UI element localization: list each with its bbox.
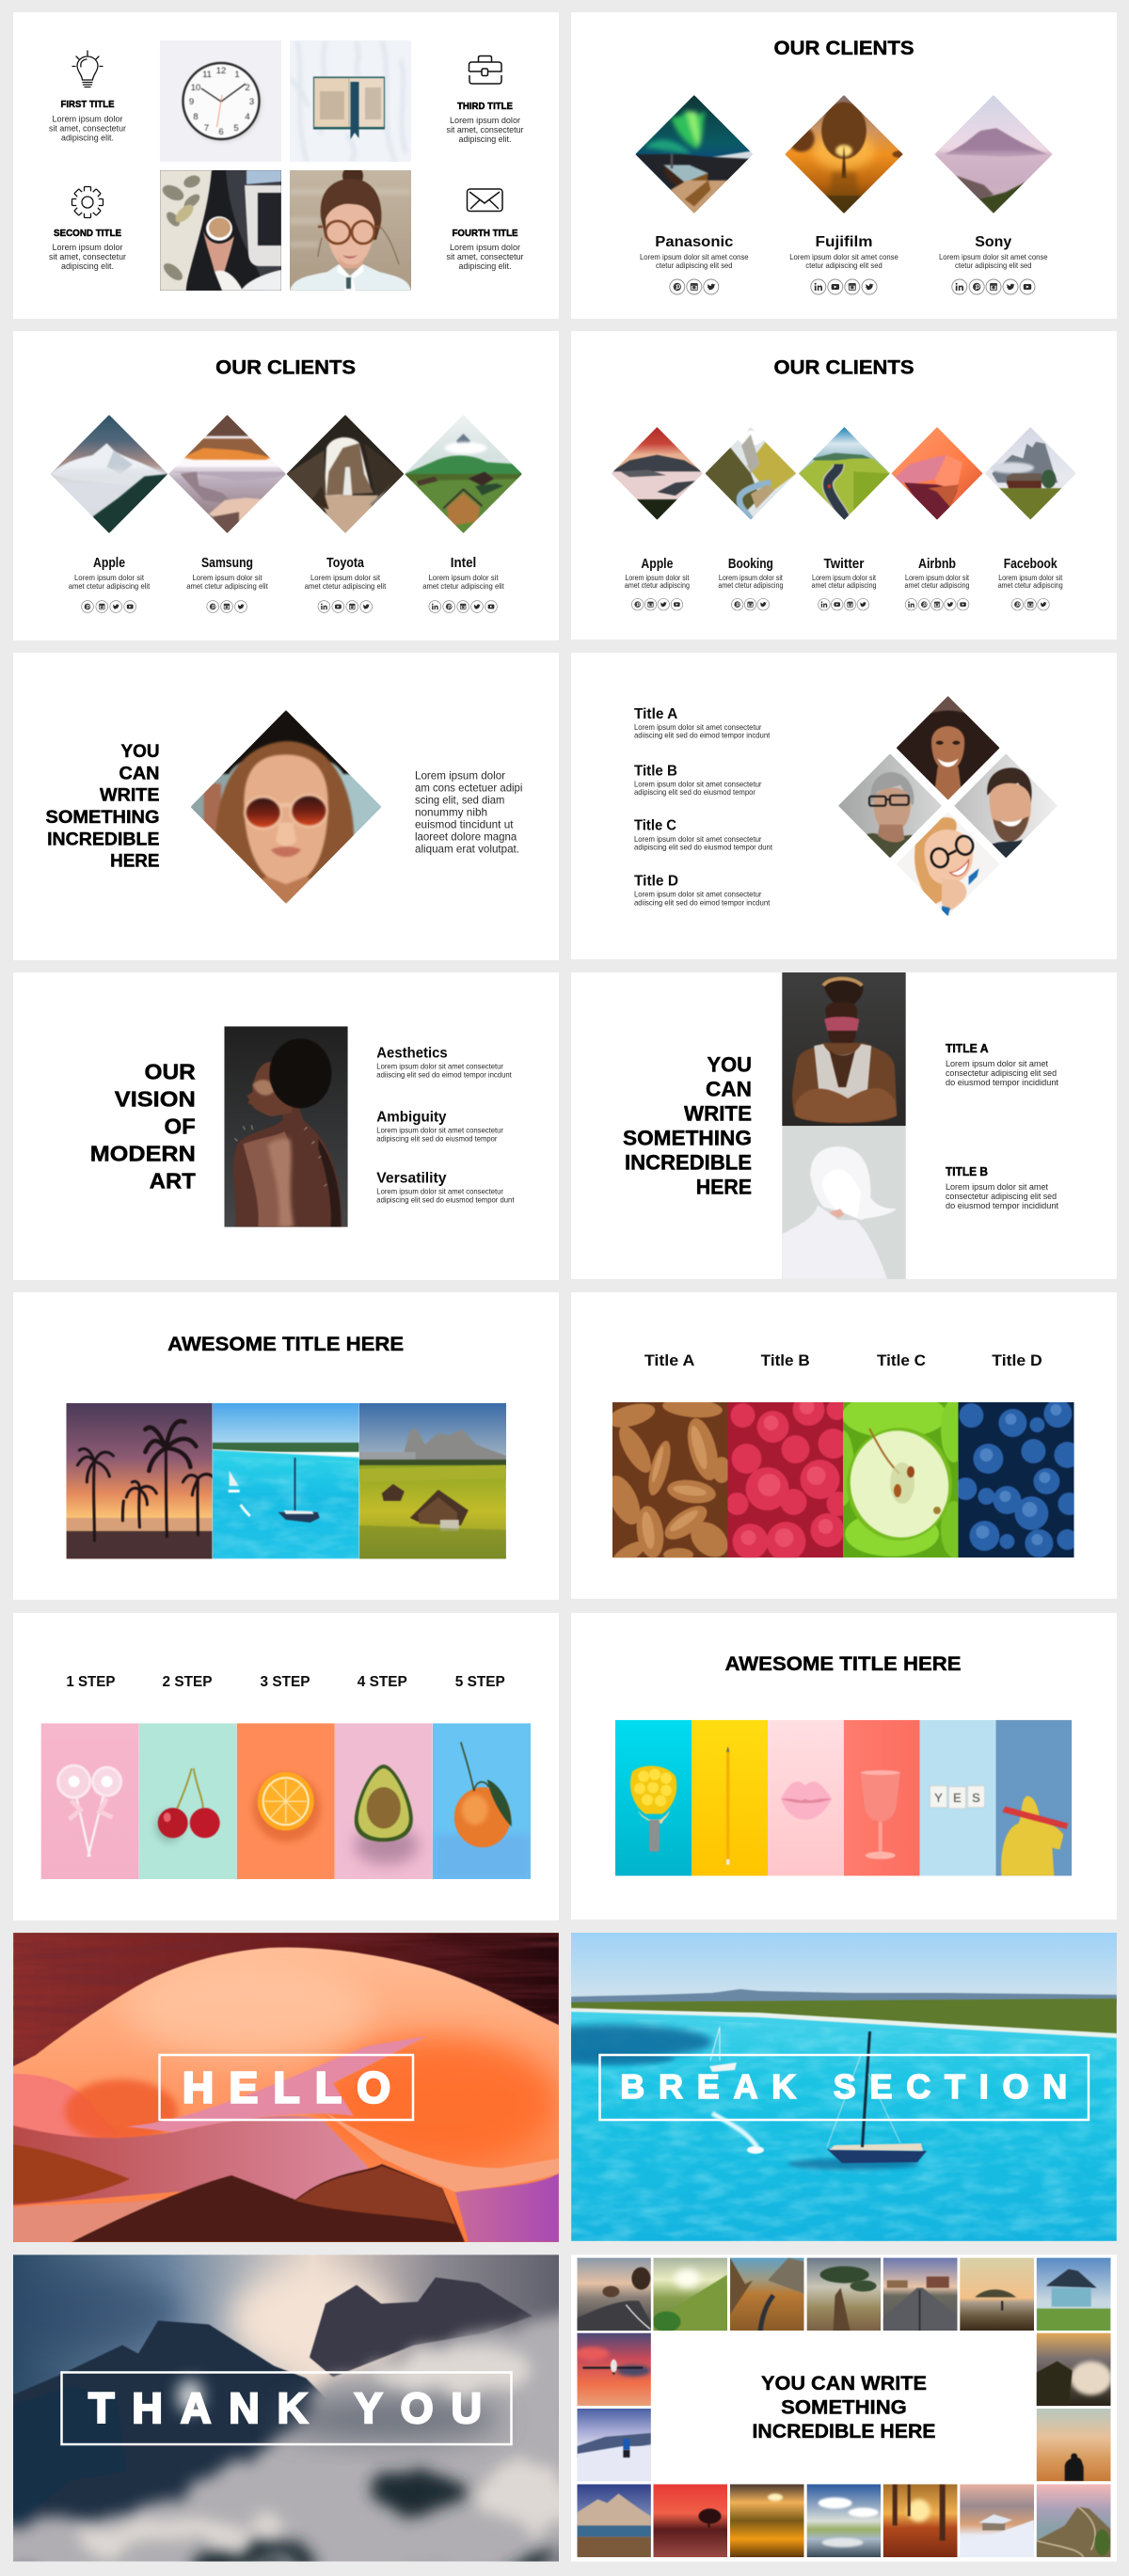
heading: our vision of modern art: VISION — [115, 1087, 196, 1112]
text: second title body: sit amet, consectetur — [49, 252, 126, 261]
panel: four fruit strips — [571, 1292, 1117, 1599]
text: first title body: sit amet, consectetur — [49, 124, 126, 134]
client: fujifilm: Fujifilm — [815, 234, 873, 250]
icon: light bulb — [72, 51, 103, 87]
panel: photo mosaic frame — [571, 2255, 1117, 2562]
photo: straight asphalt road — [883, 2257, 958, 2331]
photo: wall clock: 2 — [245, 83, 250, 93]
client: fujifilm — [789, 234, 898, 270]
item: title b: do eiusmod tempor incididunt — [946, 1201, 1058, 1210]
list item: title b: adipiscing elit sed do eiusmod tempor — [634, 787, 755, 797]
heading: third title: THIRD TITLE — [457, 102, 513, 112]
diamond photo: winding road — [799, 427, 890, 520]
client: intel: amet ctetur adipiscing elit — [422, 581, 504, 591]
photo: autumn valley road — [730, 2257, 803, 2331]
list item: title a: adiiscing elit sed do eimod tempor incdunt — [634, 731, 771, 740]
heading: you can write something incredible here: WRITE — [684, 1101, 752, 1125]
diamond photo: hut and dolomites — [985, 427, 1076, 519]
client: sony: Sony — [975, 234, 1011, 250]
list item: title b: Title B — [634, 763, 677, 779]
photo: turquoise sea and sailboat — [213, 1403, 359, 1559]
client: airbnb: amet ctetur adipiscing — [905, 581, 969, 590]
client: sony: ctetur adipiscing elit sed — [955, 261, 1032, 270]
statement: you can write something incredible here — [753, 2373, 935, 2442]
text: first title body: Lorem ipsum dolor — [53, 114, 123, 123]
item: title b — [946, 1165, 1058, 1210]
panel: thank you mountains — [0, 2255, 578, 2575]
labels: title a to d: Title C — [877, 1351, 926, 1369]
heading: our vision of modern art: MODERN — [90, 1142, 196, 1166]
text: body paragraph: Lorem ipsum dolor — [415, 769, 505, 782]
item: title a: Lorem ipsum dolor sit amet — [946, 1059, 1048, 1068]
text: second title body — [49, 243, 126, 271]
photo: lollipops on pink — [41, 1723, 139, 1879]
client: booking: Lorem ipsum dolor sit — [719, 574, 784, 582]
heading: you can write something incredible here: YOU — [708, 1052, 752, 1076]
client: facebook: amet ctetur adipiscing — [998, 581, 1063, 590]
photo: airplane in red clouds — [577, 2332, 651, 2406]
panel: statement with two photos — [571, 972, 1117, 1279]
client: panasonic — [640, 234, 749, 270]
icons: panasonic social — [670, 279, 719, 294]
title box: break section: BREAK SECTION — [620, 2067, 1067, 2106]
client: toyota: Toyota — [326, 555, 365, 571]
client: facebook: Lorem ipsum dolor sit — [998, 574, 1063, 582]
list item: title b — [634, 763, 762, 797]
heading: awesome title here: AWESOME TITLE HERE — [167, 1334, 404, 1355]
item: title b: consectetur adipiscing elit sed — [946, 1192, 1057, 1201]
heading: our vision of modern art — [90, 1060, 196, 1193]
diamond photo: green huts — [405, 416, 522, 533]
client: toyota — [305, 555, 387, 591]
item: ambiguity: Ambiguity — [376, 1109, 447, 1125]
icons: fujifilm social — [811, 279, 877, 294]
text: body paragraph: am cons ectetuer adipi — [415, 782, 522, 794]
heading: our clients: OUR CLIENTS — [215, 357, 356, 379]
list item: title a: Title A — [634, 706, 677, 722]
client: apple — [69, 555, 151, 591]
diamond photo: river valley — [706, 427, 796, 519]
photo: avocado — [335, 1723, 433, 1879]
text: second title body: Lorem ipsum dolor — [53, 243, 123, 252]
client: airbnb: Airbnb — [918, 556, 956, 572]
client: facebook: Facebook — [1004, 556, 1057, 572]
text: fourth title body: adipiscing elit. — [459, 261, 512, 271]
title box: thank you: THANK YOU — [88, 2384, 482, 2432]
client: panasonic: Lorem ipsum dolor sit amet conse — [640, 252, 749, 261]
client: twitter: Lorem ipsum dolor sit — [812, 574, 877, 582]
title box: thank you — [62, 2372, 512, 2444]
text: second title body: adipiscing elit. — [61, 261, 114, 271]
photo: autumn forest — [883, 2484, 958, 2557]
text: fourth title body — [446, 243, 523, 271]
list item: title d: Title D — [634, 873, 678, 889]
text: third title body — [446, 116, 523, 144]
photo: clouds reflected in lake — [807, 2484, 881, 2557]
client: apple: amet ctetur adipiscing — [625, 581, 690, 590]
labels: title a to d — [644, 1351, 1042, 1369]
photo: red sunset field — [653, 2484, 727, 2557]
photo: yes letter tiles — [920, 1719, 995, 1875]
text: third title body: sit amet, consectetur — [446, 125, 523, 134]
title box: break section — [600, 2055, 1089, 2120]
client: panasonic: ctetur adipiscing elit sed — [656, 261, 733, 270]
photo: coffee and laptop — [160, 170, 281, 291]
icons: samsung social — [207, 601, 246, 612]
panel: four icons and photo grid — [13, 12, 559, 319]
photo: green apple half — [843, 1402, 958, 1557]
photo: ocean and sailboat background — [571, 1933, 1117, 2241]
item: versatility: Lorem ipsum dolor sit amet consectetur — [376, 1187, 503, 1196]
client: toyota: amet ctetur adipiscing elit — [305, 581, 387, 591]
list item: title a — [634, 706, 771, 740]
panel: our clients four — [13, 331, 559, 640]
photo: cherries on mint — [139, 1723, 237, 1879]
heading: our vision of modern art: OF — [164, 1114, 196, 1139]
diamond photo: tree at sunrise — [785, 95, 903, 213]
diamond photo: red sky over fog — [612, 427, 703, 520]
client: apple — [625, 556, 690, 590]
heading: you can write something incredible here — [623, 1052, 752, 1198]
photo: hiker on snow — [577, 2409, 651, 2481]
text: third title body: Lorem ipsum dolor — [450, 116, 520, 125]
labels: steps one to five — [66, 1674, 505, 1690]
client: facebook — [998, 556, 1063, 590]
client: panasonic: Panasonic — [655, 234, 733, 250]
photo: wall clock: 4 — [245, 112, 250, 122]
labels: steps one to five: 3 STEP — [260, 1674, 310, 1690]
photo: coral wine glass — [843, 1719, 920, 1875]
icons: airbnb social — [905, 598, 969, 610]
photo: wall clock: 11 — [202, 70, 212, 80]
client: apple: Apple — [93, 555, 125, 571]
list item: title a: Lorem ipsum dolor sit amet consectetur — [634, 722, 762, 732]
client: twitter: Twitter — [824, 556, 865, 572]
icons: facebook social — [1011, 598, 1049, 610]
item: versatility — [376, 1170, 515, 1204]
list item: title b: Lorem ipsum dolor sit amet consectetur — [634, 780, 762, 789]
icons: intel social — [429, 601, 497, 612]
photo: woman with glasses — [290, 170, 411, 291]
panel: five step colour strips — [13, 1613, 559, 1920]
item: versatility: Versatility — [376, 1170, 447, 1186]
panel: portrait diamond with statement — [13, 653, 559, 960]
icons: toyota social — [318, 601, 373, 612]
client: apple: amet ctetur adipiscing elit — [69, 581, 151, 591]
photo: pink lips — [768, 1720, 843, 1875]
photo: yellow hooded figure — [995, 1719, 1073, 1875]
text: fourth title body: Lorem ipsum dolor — [450, 243, 520, 252]
item: versatility: adipiscing elit sed do eiusmod tempor dunt — [376, 1194, 515, 1204]
panel: hello canyon — [13, 1933, 559, 2242]
diamond photo: misty volcano — [935, 95, 1052, 213]
statement: you can write something incredible here: YOU CAN WRITE — [761, 2373, 927, 2394]
statement: you can write something incredible here: SOMETHING — [781, 2397, 907, 2419]
heading: you can write something incredible here: CAN — [119, 764, 160, 783]
labels: steps one to five: 1 STEP — [66, 1674, 116, 1690]
diamond photo: canyon ledge — [168, 415, 286, 533]
photo: antelope canyon background — [13, 1933, 559, 2242]
icon: gear — [72, 186, 103, 218]
photo: yes letter tiles: E — [953, 1791, 962, 1805]
client: samsung: amet ctetur adipiscing elit — [186, 581, 268, 591]
photo: wall clock: 7 — [204, 123, 209, 134]
panel: our clients three — [571, 12, 1117, 319]
labels: steps one to five: 5 STEP — [455, 1674, 505, 1690]
photo: yellow paddle on cyan — [615, 1719, 692, 1875]
list item: title d: adiiscing elit sed do eimod tempor incdunt — [634, 897, 771, 907]
photo: wall clock: 3 — [249, 97, 254, 107]
diamond photo: aurora cabin — [635, 95, 753, 213]
client: apple: Apple — [641, 556, 673, 572]
list item: title c: adipiscing elit sed do eiusmod tempor dunt — [634, 842, 773, 851]
client: airbnb: Lorem ipsum dolor sit — [905, 574, 970, 582]
client: fujifilm: Lorem ipsum dolor sit amet conse — [789, 252, 898, 261]
photo: alpine meadow with huts — [359, 1403, 506, 1559]
item: title a: TITLE A — [946, 1042, 988, 1055]
photo: blue cottage — [1037, 2257, 1110, 2331]
photo: yes letter tiles: S — [972, 1791, 980, 1805]
item: title a — [946, 1042, 1058, 1087]
photo: misty mountains background — [13, 2255, 559, 2562]
heading: our vision of modern art: OUR — [145, 1060, 196, 1084]
text: body paragraph: nonummy nibh — [415, 807, 487, 819]
panel: awesome title with three landscapes — [13, 1292, 559, 1600]
heading: you can write something incredible here — [45, 742, 160, 872]
text: body paragraph: laoreet dolore magna — [415, 831, 517, 844]
diamond photo: older man with glasses — [838, 754, 942, 858]
icons: apple social — [82, 601, 136, 612]
item: ambiguity: adipiscing elit sed do eiusmod tempor — [376, 1133, 498, 1143]
photo: raspberries — [728, 1402, 843, 1557]
text: third title body: adipiscing elit. — [459, 134, 512, 144]
heading: second title: SECOND TITLE — [54, 229, 121, 239]
client: toyota: Lorem ipsum dolor sit — [310, 573, 381, 582]
item: aesthetics: adiiscing elit sed do eimod tempor incdunt — [376, 1069, 512, 1079]
heading: you can write something incredible here: CAN — [706, 1077, 752, 1100]
client: fujifilm: ctetur adipiscing elit sed — [805, 261, 883, 270]
client: samsung: Lorem ipsum dolor sit — [192, 573, 262, 582]
panel: our vision of modern art — [13, 972, 559, 1280]
text: body paragraph: scing elit, sed diam — [415, 794, 504, 806]
photo: orange slice — [237, 1723, 335, 1879]
photo: island at dusk — [960, 2257, 1034, 2331]
panel: team list with diamond portraits — [571, 653, 1117, 959]
photo: wall clock: 6 — [218, 127, 224, 137]
photo: wall clock: 9 — [189, 97, 194, 107]
text: body paragraph: aliquam erat volutpat. — [415, 844, 519, 856]
photo: snowy hut by sea — [960, 2484, 1034, 2557]
diamond photo: woman in sunglasses — [190, 710, 382, 904]
labels: title a to d: Title B — [761, 1351, 810, 1369]
photo: wall clock — [160, 40, 281, 162]
client: sony — [939, 234, 1048, 270]
photo: tangerine with leaf — [433, 1723, 531, 1879]
photo: wall clock: 12 — [216, 66, 226, 76]
text: first title body: adipiscing elit. — [61, 134, 114, 143]
item: title a: do eiusmod tempor incididunt — [946, 1078, 1058, 1087]
item: ambiguity: Lorem ipsum dolor sit amet consectetur — [376, 1126, 503, 1135]
item: title a: consectetur adipiscing elit sed — [946, 1068, 1057, 1078]
panel: our clients five — [571, 331, 1117, 640]
photo: lone pine tree — [807, 2257, 881, 2331]
photo: silhouette at sunset — [1037, 2409, 1110, 2481]
item: aesthetics — [376, 1045, 512, 1079]
photo: great wall at sunset — [1037, 2484, 1110, 2557]
heading: you can write something incredible here: YOU — [120, 742, 160, 762]
list item: title d: Lorem ipsum dolor sit amet consectetur — [634, 890, 762, 899]
labels: title a to d: Title D — [992, 1351, 1042, 1369]
photo: golden marsh — [730, 2484, 803, 2557]
diamond photo: smiling bearded man — [954, 754, 1057, 858]
photo: woman with white hair — [782, 1127, 906, 1279]
client: booking — [718, 556, 784, 590]
labels: steps one to five: 4 STEP — [358, 1674, 407, 1690]
text: first title body — [49, 114, 126, 143]
heading: you can write something incredible here: SOMETHING — [45, 808, 160, 828]
list item: title c: Lorem ipsum dolor sit amet consectetur — [634, 834, 762, 844]
heading: you can write something incredible here: INCREDIBLE — [47, 830, 159, 849]
photo: woman from behind — [224, 1026, 348, 1227]
client: sony: Lorem ipsum dolor sit amet conse — [939, 252, 1048, 261]
heading: awesome title here: AWESOME TITLE HERE — [724, 1653, 962, 1675]
photo: almonds — [612, 1402, 728, 1557]
diamond photo: blonde woman with glasses — [897, 813, 999, 916]
client: intel — [422, 555, 504, 591]
statement: you can write something incredible here: INCREDIBLE HERE — [753, 2421, 935, 2442]
client: booking: amet ctetur adipiscing — [718, 581, 783, 590]
icon: briefcase — [469, 56, 501, 84]
photo: waves on rocky coast — [1037, 2332, 1110, 2406]
client: booking: Booking — [728, 556, 773, 572]
diamond photo: snowy peak — [51, 415, 167, 533]
labels: title a to d: Title A — [644, 1351, 694, 1369]
diamond photo: pink canyon — [892, 427, 982, 519]
client: intel: Intel — [451, 555, 476, 571]
photo: curved road at dusk — [577, 2257, 651, 2331]
item: ambiguity — [376, 1109, 503, 1143]
diamond photo: woman with curly hair — [896, 696, 999, 799]
panel: awesome title with six colour strips — [571, 1613, 1117, 1920]
labels: steps one to five: 2 STEP — [162, 1674, 213, 1690]
client: samsung: Samsung — [201, 555, 253, 571]
photo: blueberries — [958, 1402, 1074, 1557]
photo: wall clock: 5 — [233, 123, 239, 134]
heading: you can write something incredible here: INCREDIBLE — [625, 1150, 752, 1174]
client: twitter: amet ctetur adipiscing — [811, 581, 877, 590]
title box: hello: HELLO — [183, 2063, 390, 2112]
client: twitter — [811, 556, 877, 590]
photo: reflective alpine lake — [577, 2484, 651, 2557]
icons: booking social — [731, 598, 769, 610]
icon: envelope — [467, 189, 502, 211]
item: aesthetics: Aesthetics — [376, 1045, 448, 1061]
photo: man with crossed arms — [782, 972, 906, 1127]
list item: title c — [634, 818, 773, 851]
heading: you can write something incredible here: HERE — [696, 1175, 752, 1198]
icons: twitter social — [819, 598, 869, 610]
item: aesthetics: Lorem ipsum dolor sit amet consectetur — [376, 1062, 503, 1071]
photo: wall clock: 10 — [191, 83, 200, 93]
heading: you can write something incredible here: HERE — [110, 852, 160, 872]
heading: our clients: OUR CLIENTS — [773, 38, 914, 59]
client: airbnb — [905, 556, 970, 590]
icons: apple social — [631, 598, 683, 610]
item: title b: Lorem ipsum dolor sit amet — [946, 1182, 1048, 1192]
text: fourth title body: sit amet, consectetur — [446, 252, 523, 261]
client: intel: Lorem ipsum dolor sit — [429, 573, 499, 582]
photo: palm sunset — [66, 1403, 213, 1559]
client: apple: Lorem ipsum dolor sit — [74, 573, 145, 582]
heading: you can write something incredible here: WRITE — [100, 786, 160, 806]
photo: yes letter tiles: Y — [934, 1791, 943, 1805]
list item: title d — [634, 873, 771, 907]
text: body paragraph — [415, 769, 522, 856]
icons: sony social — [952, 279, 1035, 294]
client: apple: Lorem ipsum dolor sit — [625, 574, 690, 582]
text: body paragraph: euismod tincidunt ut — [415, 819, 514, 831]
title box: hello — [160, 2055, 413, 2120]
photo: sunlit green hillside — [653, 2257, 727, 2331]
item: title b: TITLE B — [946, 1165, 988, 1178]
photo: wall clock: 1 — [234, 70, 240, 80]
panel: break section ocean — [505, 1933, 1117, 2241]
diamond photo: sea arch — [286, 415, 405, 533]
heading: you can write something incredible here: SOMETHING — [623, 1126, 752, 1149]
photo: pencil on yellow — [692, 1719, 768, 1875]
list item: title c: Title C — [634, 818, 676, 834]
heading: our vision of modern art: ART — [150, 1169, 196, 1193]
heading: our clients: OUR CLIENTS — [773, 357, 914, 379]
photo: wall clock: 8 — [193, 112, 199, 122]
photo: open book on sheets — [290, 40, 411, 162]
heading: first title: FIRST TITLE — [60, 100, 115, 110]
client: samsung — [186, 555, 268, 591]
heading: fourth title: FOURTH TITLE — [452, 229, 518, 239]
